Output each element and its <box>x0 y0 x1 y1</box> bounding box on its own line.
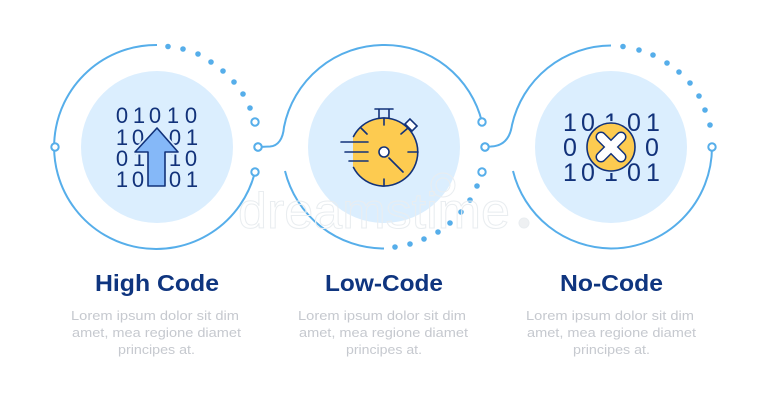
icon: binary digits with up arrow: 0 <box>116 146 128 171</box>
icon: binary digits with cross badge: 0 <box>645 134 659 162</box>
icon: binary digits with up arrow: 1 <box>116 167 128 192</box>
icon: binary digits with up arrow <box>116 103 198 192</box>
dotted arc: high code <box>165 44 253 111</box>
icon: binary digits with cross badge: 1 <box>646 109 660 137</box>
icon: binary digits with up arrow: 1 <box>186 125 198 150</box>
icon: binary digits with up arrow: 0 <box>169 125 181 150</box>
icon: stopwatch <box>341 109 418 186</box>
icon: binary digits with up arrow: 0 <box>116 103 128 128</box>
icon: binary digits with cross badge: 1 <box>604 159 618 187</box>
icon: binary digits with cross badge: 1 <box>646 159 660 187</box>
icon: binary digits with up arrow: 0 <box>169 167 181 192</box>
icon: binary digits with cross badge: 0 <box>627 159 641 187</box>
lower arc: no-code <box>513 147 712 248</box>
ring markers: low-code <box>254 118 489 176</box>
panel: no-code <box>481 44 716 357</box>
icon: binary digits with cross badge: 0 <box>581 159 595 187</box>
upper arc with connector: no-code <box>485 46 611 147</box>
ring markers: no-code <box>481 143 716 151</box>
background disc: high code <box>81 71 233 223</box>
icon: binary digits with up arrow: 1 <box>116 125 128 150</box>
outer arc: high code <box>54 45 255 249</box>
text block: no-code: amet, mea regione diamet <box>527 325 696 340</box>
icon: binary digits with up arrow: 1 <box>133 146 145 171</box>
icon: binary digits with up arrow: 1 <box>186 167 198 192</box>
icon: binary digits with up arrow: 0 <box>132 125 144 150</box>
text block: low-code <box>298 308 468 357</box>
icon: binary digits with cross badge: 0 <box>563 134 577 162</box>
icon: binary digits with cross badge: 0 <box>581 109 595 137</box>
heading: low-code: Low-Code <box>325 270 443 296</box>
ring markers: high code <box>51 118 262 176</box>
heading: no-code: No-Code <box>560 270 663 296</box>
text block: no-code: Lorem ipsum dolor sit dim <box>526 308 694 323</box>
lower arc: low-code <box>285 171 384 248</box>
watermark: dreamstime <box>238 183 510 239</box>
icon: binary digits with up arrow: 1 <box>167 103 179 128</box>
icon: binary digits with cross badge: 1 <box>604 109 618 137</box>
icon: binary digits with up arrow: 1 <box>169 146 181 171</box>
text block: no-code <box>526 308 696 357</box>
panel: high code <box>51 44 262 357</box>
upper arc with connector: low-code <box>258 45 482 147</box>
icon: binary digits with cross badge: 0 <box>627 109 641 137</box>
icon: binary digits with up arrow: 1 <box>133 103 145 128</box>
text block: low-code: principes at. <box>346 342 422 357</box>
background disc: low-code <box>308 71 460 223</box>
icon: binary digits with up arrow: 0 <box>132 167 144 192</box>
icon: binary digits with cross badge: 1 <box>563 109 577 137</box>
background disc: no-code <box>535 71 687 223</box>
text block: high code: Lorem ipsum dolor sit dim <box>71 308 239 323</box>
text block: high code: amet, mea regione diamet <box>72 325 241 340</box>
dotted arc: low-code <box>392 183 480 250</box>
panel: low-code <box>254 45 489 357</box>
dotted arc: no-code <box>620 44 713 128</box>
text block: high code: principes at. <box>118 342 195 357</box>
text block: high code <box>71 308 241 357</box>
icon: binary digits with up arrow: 0 <box>149 103 161 128</box>
text block: no-code: principes at. <box>573 342 650 357</box>
heading: high code: High Code <box>95 270 219 296</box>
icon: binary digits with cross badge: 1 <box>563 159 577 187</box>
text block: low-code: amet, mea regione diamet <box>299 325 468 340</box>
icon: binary digits with up arrow: 0 <box>185 103 197 128</box>
icon: binary digits with cross badge <box>563 109 660 187</box>
text block: low-code: Lorem ipsum dolor sit dim <box>298 308 466 323</box>
icon: binary digits with up arrow: 0 <box>185 146 197 171</box>
